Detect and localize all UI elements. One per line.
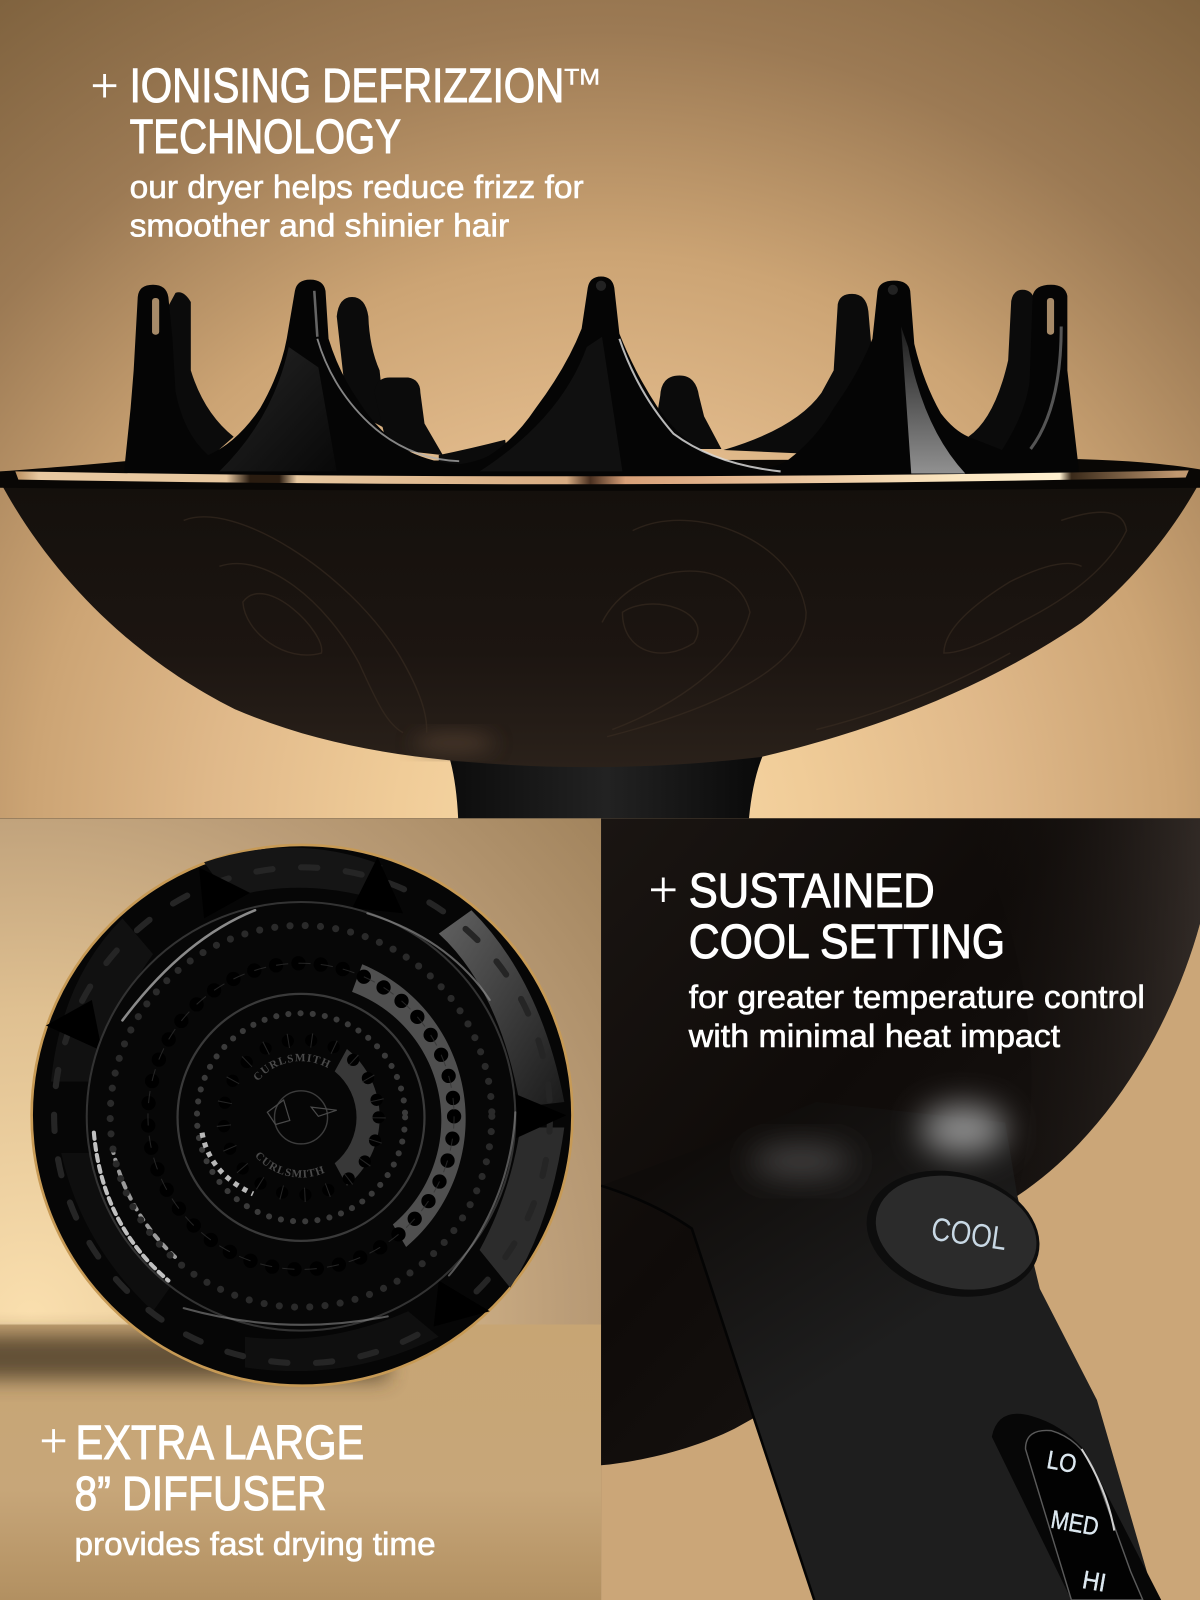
floor [0, 1324, 601, 1600]
speed labels: LO [1045, 1446, 1079, 1479]
heading: TM [564, 65, 600, 90]
disc shadow [0, 1335, 388, 1380]
heading: COOL SETTING [689, 916, 1005, 969]
heading: EXTRA LARGE [76, 1417, 364, 1470]
heading: TECHNOLOGY [130, 111, 401, 164]
heading: 8” DIFFUSER [74, 1468, 327, 1521]
outer ring [87, 902, 515, 1331]
description: smoother and shinier hair [130, 207, 509, 244]
bowl embossed swirls [184, 512, 1127, 737]
peg ring inner [197, 1013, 405, 1221]
cool button [853, 1153, 1053, 1314]
speed labels [1045, 1446, 1108, 1598]
bowl rim [0, 459, 1200, 491]
inner reflection [335, 1049, 380, 1186]
diffuser back prongs [168, 290, 1035, 469]
plus sign [93, 74, 116, 97]
panel: sustained cool setting [601, 818, 1200, 1600]
description: provides fast drying time [74, 1525, 436, 1562]
peg ring outer [110, 926, 492, 1307]
panel background [0, 0, 1200, 818]
wall background [0, 818, 601, 1329]
gold rim [32, 845, 572, 1386]
diffuser bowl [0, 482, 1200, 767]
heading: SUSTAINED [689, 865, 935, 918]
inner ring [178, 994, 424, 1241]
speed switch [992, 1414, 1161, 1600]
description [130, 174, 584, 237]
plus sign [42, 1429, 65, 1453]
plus sign [651, 878, 676, 902]
cool label: COOL [929, 1210, 1009, 1257]
panel: extra large diffuser [0, 818, 601, 1600]
speed labels: MED [1049, 1506, 1101, 1542]
heading: IONISING DEFRIZZION [130, 60, 564, 113]
handle seam [601, 1186, 814, 1600]
description: our dryer helps reduce frizz for [130, 168, 584, 205]
logo: CURLSMITH [254, 1054, 331, 1080]
neck highlights [750, 1105, 1006, 1176]
gold band [15, 470, 1189, 484]
heading [76, 1424, 363, 1511]
speed labels: HI [1080, 1566, 1108, 1598]
logo: CURLSMITH [256, 1152, 325, 1178]
outer reflective wedges [51, 848, 564, 1371]
inner air holes [342, 1054, 380, 1184]
inner glint arc [202, 1133, 253, 1194]
crown highlights [152, 281, 1061, 473]
bowl glow [413, 734, 495, 752]
description [688, 978, 1145, 1054]
ring highlights [94, 910, 515, 1325]
logo [254, 1054, 337, 1178]
description: with minimal heat impact [688, 1017, 1060, 1054]
heading [689, 865, 1005, 969]
dryer bowl [601, 818, 1200, 1465]
heading [130, 68, 598, 154]
diffuser side view [0, 277, 1200, 818]
outer slots [54, 867, 550, 1363]
panel: ionising technology [0, 0, 1200, 818]
star ribs [46, 857, 566, 1327]
dryer handle [601, 1102, 1155, 1600]
diffuser front view [30, 844, 574, 1387]
diffuser neck [450, 756, 762, 818]
diffuser front crown [124, 277, 1079, 478]
reflection arc [352, 964, 466, 1247]
panel background [601, 818, 1200, 1600]
description: for greater temperature control [689, 978, 1145, 1015]
air holes ring [357, 970, 462, 1240]
